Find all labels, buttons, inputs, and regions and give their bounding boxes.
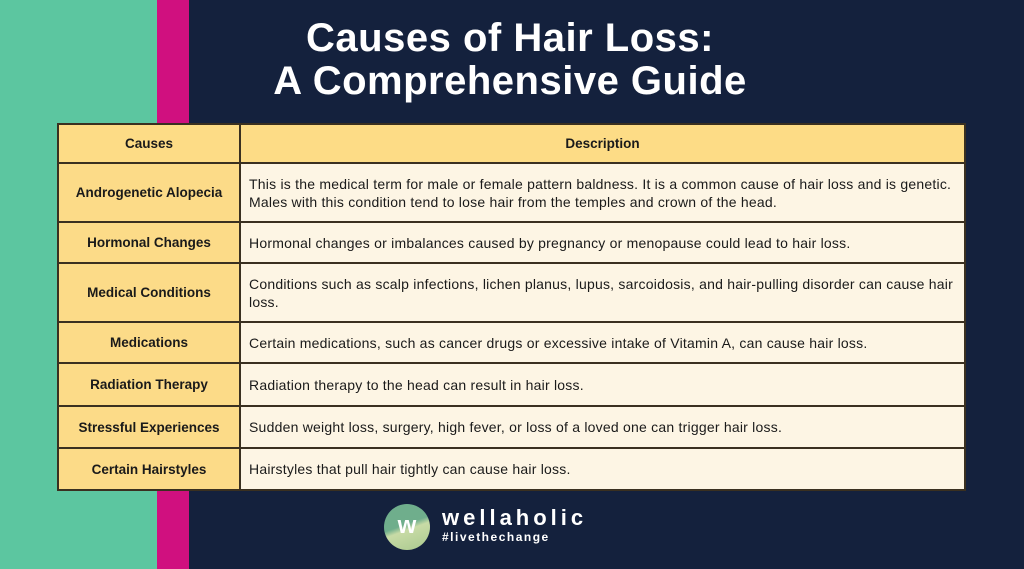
icon: logo circle: w [398,512,416,539]
table [57,123,966,491]
table: Medications [110,335,188,350]
table: Description [565,136,640,151]
table: This is the medical term for male or female pattern baldness. It is a common cause of hair loss and is genetic. [249,176,951,192]
table: Conditions such as scalp infections, lichen planus, lupus, sarcoidosis, and hair-pulling disorder can cause hair [249,276,953,292]
magenta strip [157,0,189,569]
table: Hairstyles that pull hair tightly can cause hair loss. [249,461,571,477]
table: Androgenetic Alopecia [76,185,222,200]
table: Radiation therapy to the head can result in hair loss. [249,376,584,392]
table: Hormonal Changes [87,235,211,250]
table: Certain Hairstyles [92,462,206,476]
table: Males with this condition tend to lose hair from the temples and crown of the head. [249,194,777,210]
table: Causes [125,136,173,151]
teal strip [0,0,157,569]
table: Hormonal changes or imbalances caused by pregnancy or menopause could lead to hair loss. [249,234,850,250]
table: Medical Conditions [87,285,211,300]
title: Causes of Hair Loss: [306,16,714,60]
brand name: wellaholic [442,505,587,530]
table: loss. [249,294,279,310]
table: Sudden weight loss, surgery, high fever, or loss of a loved one can trigger hair loss. [249,419,782,435]
icon: logo circle [384,504,430,550]
logo [384,504,587,550]
table: Certain medications, such as cancer drugs or excessive intake of Vitamin A, can cause hair loss. [249,334,867,350]
title [273,16,747,103]
title: A Comprehensive Guide [273,59,747,103]
table: Stressful Experiences [78,420,220,434]
tagline: #livethechange [442,530,550,544]
table: Radiation Therapy [90,377,208,392]
